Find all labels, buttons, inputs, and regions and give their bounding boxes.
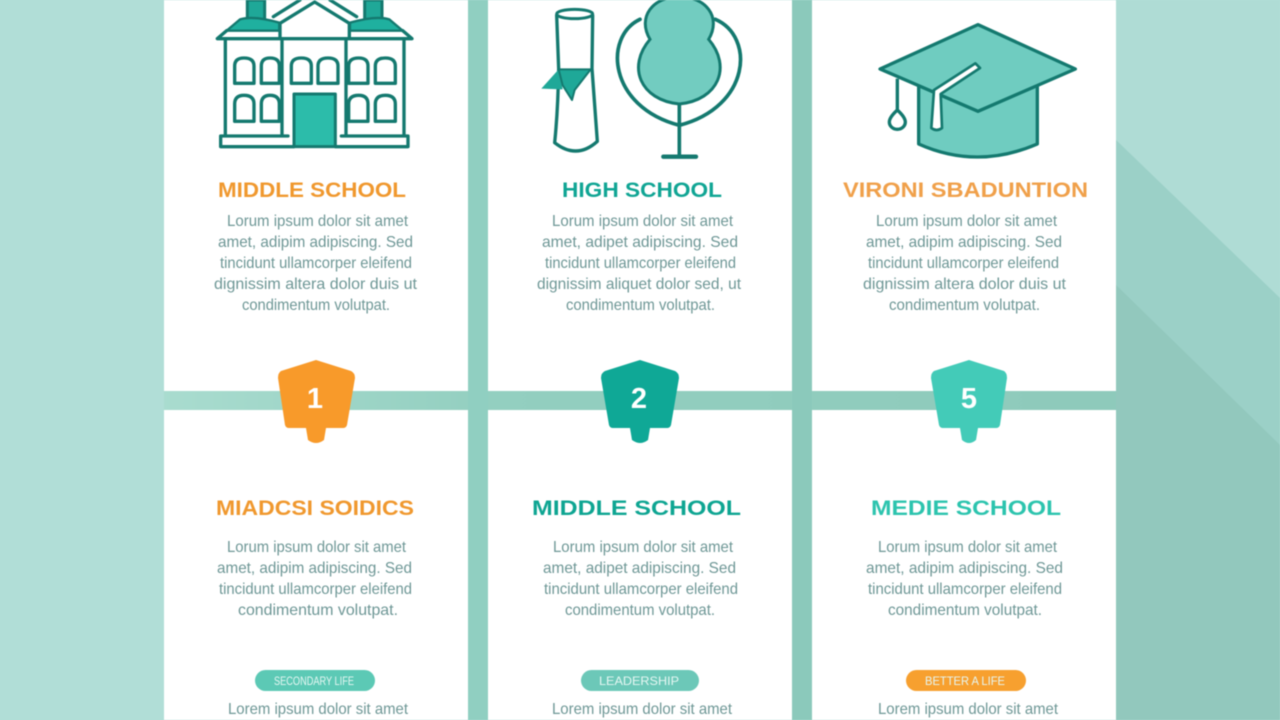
text block: condimentum volutpat.	[565, 602, 715, 619]
heading: MIDDLE SCHOOL	[218, 179, 406, 202]
badge 1	[278, 360, 355, 443]
badge 1: 1	[307, 383, 323, 415]
text block	[866, 539, 1063, 619]
text block	[863, 213, 1067, 314]
heading: HIGH SCHOOL	[562, 179, 722, 202]
icon: school building	[217, 0, 412, 147]
card: top left	[164, 0, 468, 391]
text block: tincidunt ullamcorper eleifend	[219, 581, 412, 598]
heading: MIDDLE SCHOOL	[532, 497, 741, 520]
heading: VIRONI SBADUNTION	[843, 179, 1088, 202]
card: top centre	[488, 0, 792, 391]
footer text: Lorem ipsum dolor sit amet	[878, 701, 1059, 718]
icon: diploma and tree	[541, 0, 740, 157]
text block: amet, adipet adipiscing. Sed	[542, 234, 738, 251]
text block: amet, adipet adipiscing. Sed	[543, 560, 736, 577]
footer text: Lorem ipsum dolor sit amet	[552, 701, 733, 718]
text block: tincidunt ullamcorper eleifend	[868, 255, 1059, 272]
text block: condimentum volutpat.	[242, 297, 390, 314]
text block: tincidunt ullamcorper eleifend	[220, 255, 412, 272]
text block	[543, 539, 738, 619]
text block: condimentum volutpat.	[566, 297, 715, 314]
text block: Lorum ipsum dolor sit amet	[553, 539, 734, 556]
text block: tincidunt ullamcorper eleifend	[868, 581, 1062, 598]
text block: tincidunt ullamcorper eleifend	[544, 581, 738, 598]
icon: graduation cap	[880, 25, 1075, 157]
grid gutters	[164, 0, 1116, 720]
text block: tincidunt ullamcorper eleifend	[545, 255, 736, 272]
text block	[537, 213, 742, 314]
text block	[214, 213, 418, 314]
badge 2: 2	[631, 383, 647, 415]
card: bottom centre	[488, 410, 792, 720]
badge 3: 5	[961, 383, 977, 415]
left background panel	[0, 0, 164, 720]
right background panel	[1116, 0, 1280, 720]
text block: dignissim aliquet dolor sed, ut	[537, 276, 742, 293]
text block: condimentum volutpat.	[889, 297, 1040, 314]
heading: MIADCSI SOIDICS	[216, 497, 414, 520]
text block: Lorum ipsum dolor sit amet	[227, 539, 407, 556]
heading: MEDIE SCHOOL	[871, 497, 1061, 520]
text block: condimentum volutpat.	[888, 602, 1042, 619]
text block: Lorum ipsum dolor sit amet	[878, 539, 1058, 556]
pill label	[906, 670, 1026, 691]
text block	[217, 539, 412, 619]
text block: amet, adipim adipiscing. Sed	[866, 560, 1063, 577]
card: top right	[812, 0, 1116, 391]
card: bottom right	[812, 410, 1116, 720]
pill label: LEADERSHIP	[599, 674, 679, 688]
text block: amet, adipim adipiscing. Sed	[218, 234, 413, 251]
pill label: SECONDARY LIFE	[274, 674, 354, 688]
text block: condimentum volutpat.	[238, 602, 398, 619]
text block: Lorum ipsum dolor sit amet	[876, 213, 1058, 230]
text block: Lorum ipsum dolor sit amet	[227, 213, 409, 230]
text block: amet, adipim adipiscing. Sed	[217, 560, 412, 577]
text block: dignissim altera dolor duis ut	[863, 276, 1067, 293]
pill label: BETTER A LIFE	[925, 674, 1005, 688]
text block: dignissim altera dolor duis ut	[214, 276, 418, 293]
pill label	[581, 670, 699, 691]
pill label	[255, 670, 375, 691]
badge 3	[931, 360, 1007, 443]
card: bottom left	[164, 410, 468, 720]
badge 2	[601, 360, 679, 443]
text block: amet, adipim adipiscing. Sed	[866, 234, 1062, 251]
footer text: Lorem ipsum dolor sit amet	[228, 701, 409, 718]
text block: Lorum ipsum dolor sit amet	[552, 213, 734, 230]
